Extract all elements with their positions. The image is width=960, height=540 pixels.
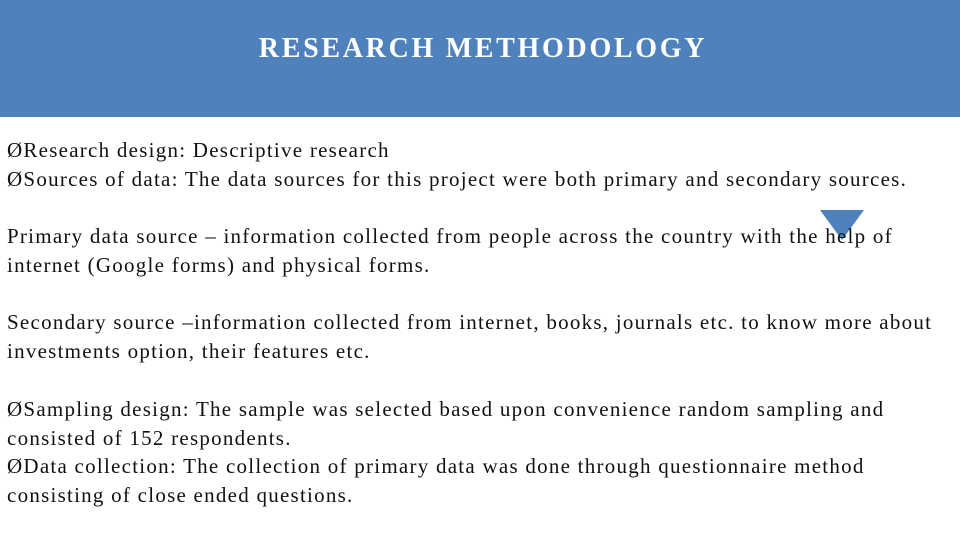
text: primary source: Primary data source – information collected from people across the country with the help of: [7, 224, 893, 248]
title: RESEARCH METHODOLOGY: [259, 33, 707, 64]
text: primary source: [7, 224, 893, 277]
text: data collection: consisting of close ended questions.: [7, 483, 354, 507]
text: data collection: [7, 454, 865, 507]
text: primary source: internet (Google forms) and physical forms.: [7, 253, 430, 277]
text: sampling design: consisted of 152 respondents.: [7, 426, 292, 450]
text: research design: ØResearch design: Descriptive research: [7, 138, 390, 162]
text: data collection: ØData collection: The collection of primary data was done through questionnaire method: [7, 454, 865, 478]
text: sources of data: ØSources of data: The data sources for this project were both primary and secondary sources.: [7, 167, 907, 191]
header band: [0, 0, 960, 117]
decorative triangle marker: [820, 210, 864, 240]
text: secondary source: [7, 310, 932, 363]
text: secondary source: Secondary source –information collected from internet, books, journals etc. to know more about: [7, 310, 932, 334]
text: sampling design: ØSampling design: The sample was selected based upon convenience random sampling and: [7, 397, 884, 421]
text: secondary source: investments option, their features etc.: [7, 339, 371, 363]
text: sampling design: [7, 397, 884, 450]
